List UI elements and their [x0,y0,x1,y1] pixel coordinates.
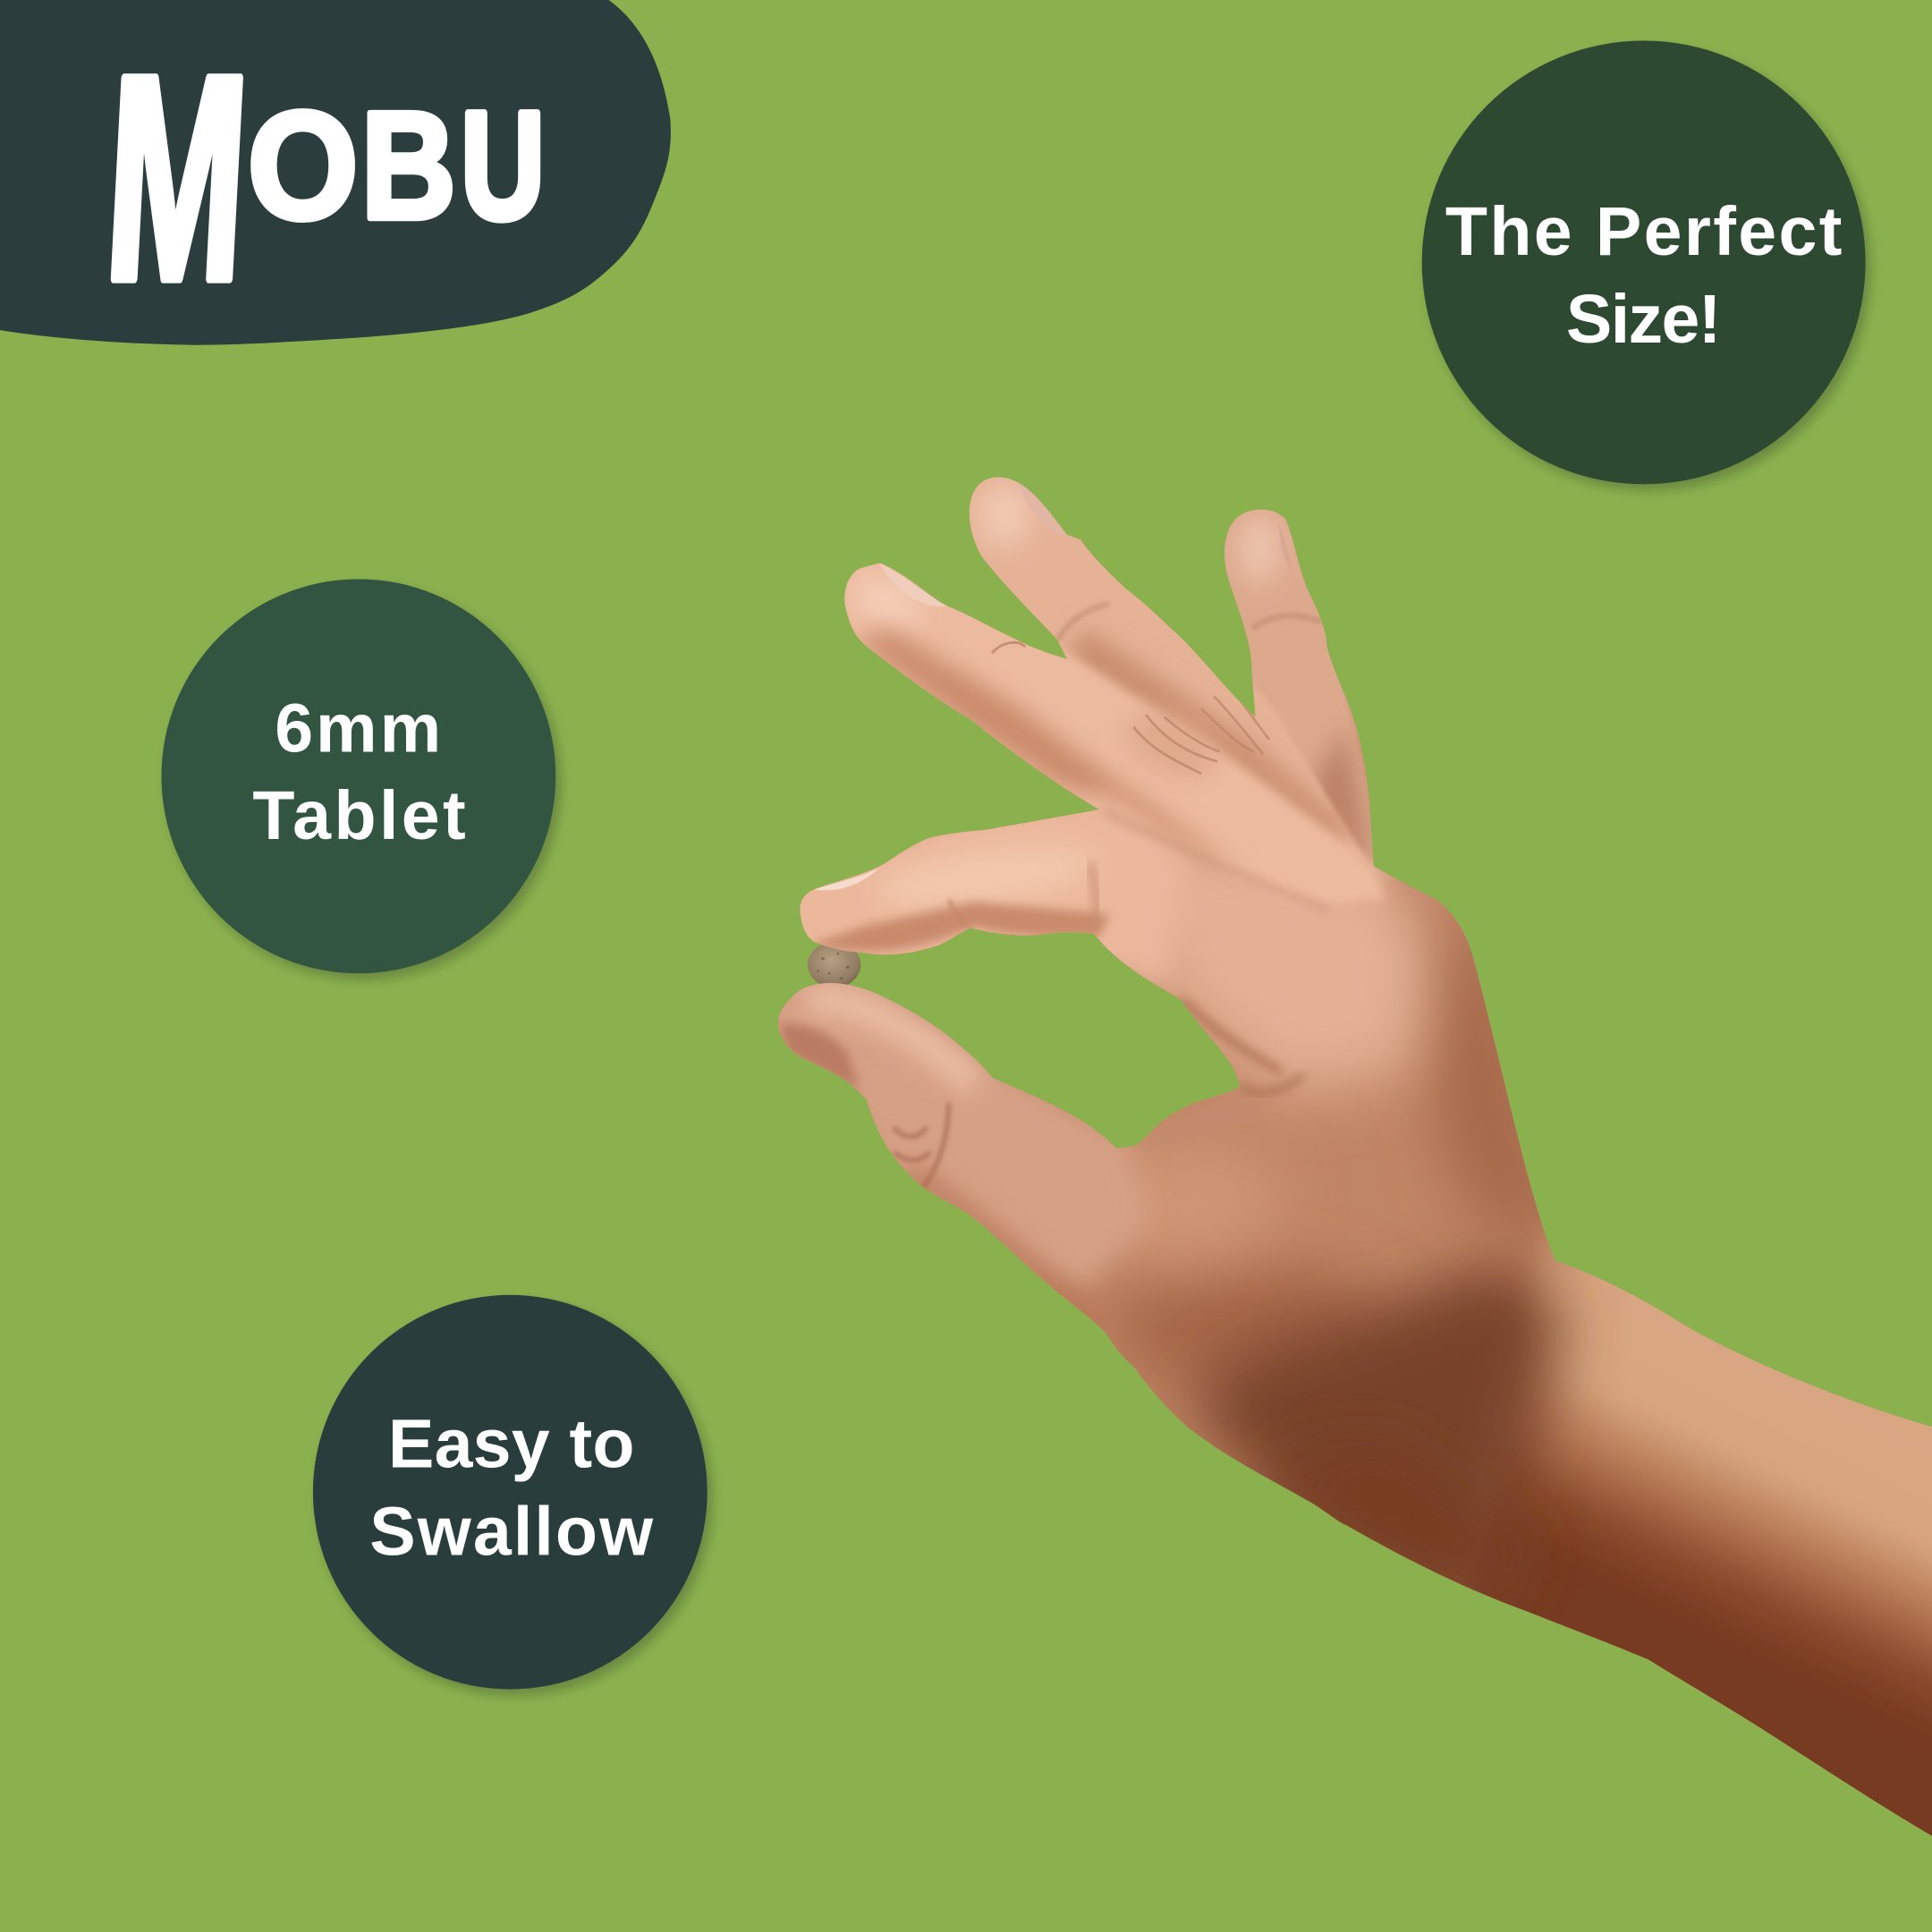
badge: 6mm tablet: 6mm [275,690,441,767]
logo wordmark: O [248,80,358,250]
middle finger [826,548,1386,905]
badge: easy to swallow [313,1295,708,1690]
wrist highlight and crease [1239,1071,1306,1098]
badge: the perfect size: Size! [1566,281,1721,358]
logo wordmark [99,16,545,341]
badge: the perfect size [1422,40,1866,484]
logo wordmark: U [461,81,545,251]
tablet held between fingers [808,942,860,987]
badge: 6mm tablet: Tablet [252,777,466,854]
palm and wrist shadow [1109,887,1571,1639]
logo wordmark: B [361,80,456,250]
logo panel [0,0,671,345]
index finger [770,795,1328,1072]
back of hand highlights [1134,853,1465,1283]
logo wordmark: M [99,16,255,341]
pinky finger [1224,510,1391,880]
hand holding tablet [758,456,1932,1897]
arm shading [1462,1233,1932,1835]
badge: easy to swallow: Easy to [388,1406,634,1483]
ring finger [970,477,1363,857]
badge: the perfect size: The Perfect [1445,193,1842,270]
badge: 6mm tablet [161,579,555,973]
thumb [778,983,1150,1318]
badge: easy to swallow: Swallow [369,1493,654,1570]
